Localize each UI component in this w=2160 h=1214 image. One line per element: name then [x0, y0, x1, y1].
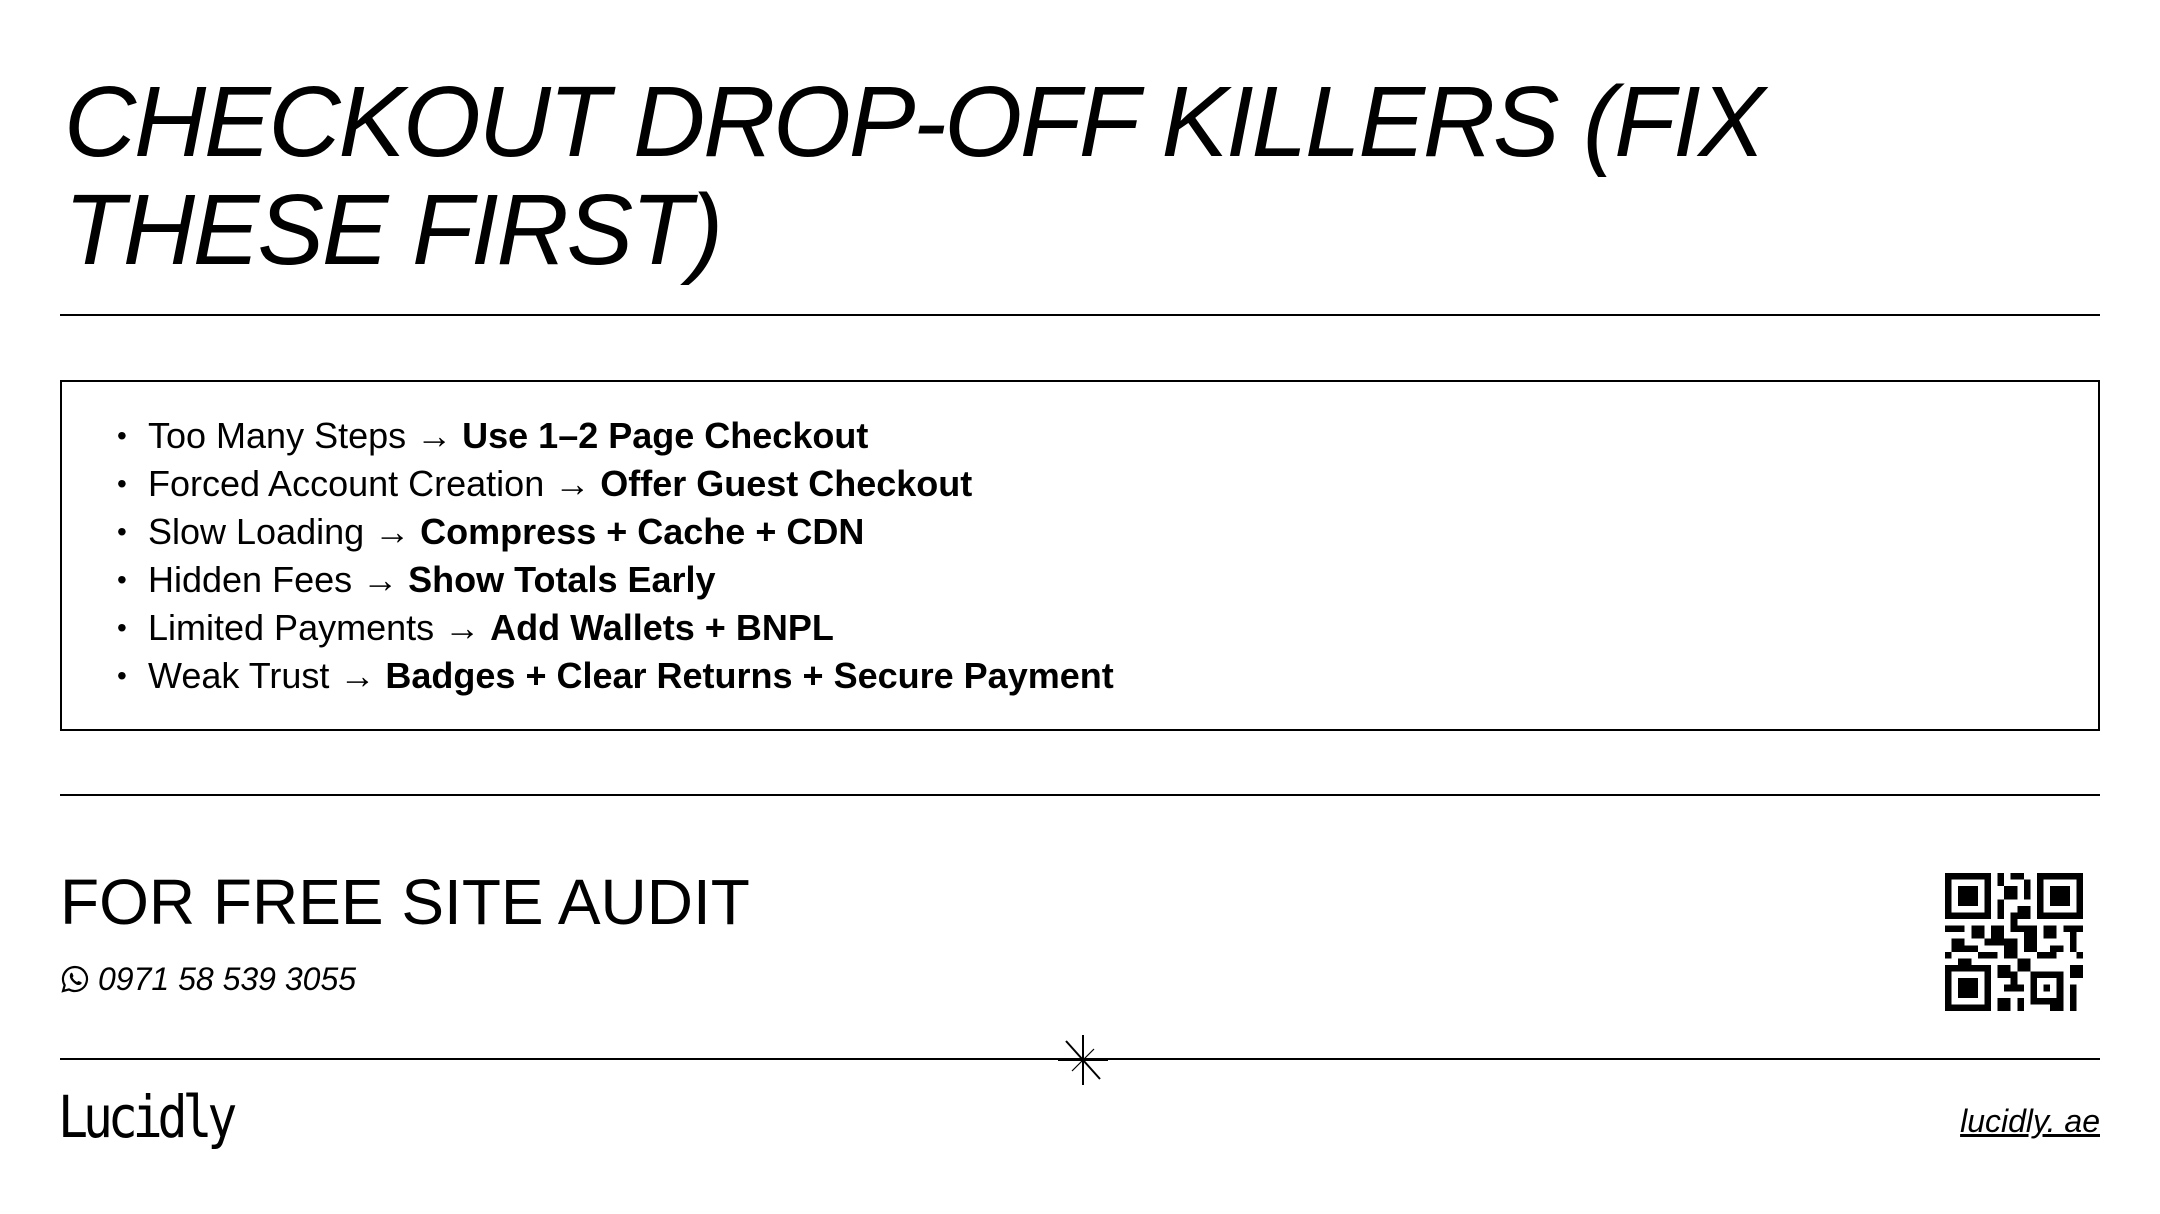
list of killers and fixes: Forced Account Creation → Offer Guest Checkout — [148, 463, 972, 504]
list of killers and fixes: Too Many Steps → Use 1–2 Page Checkout — [148, 415, 868, 456]
icon: sparkle star — [1058, 1035, 1108, 1085]
contact phone: 0971 58 539 3055 — [98, 961, 356, 997]
list of killers and fixes: Limited Payments → Add Wallets + BNPL — [148, 607, 834, 648]
panel: checklist box — [60, 380, 2100, 731]
website link: lucidly. ae — [1960, 1103, 2100, 1139]
logo: Lucidly: Lucidly — [58, 1083, 232, 1151]
list of killers and fixes — [118, 415, 1114, 696]
list of killers and fixes: Hidden Fees → Show Totals Early — [148, 559, 716, 600]
list of killers and fixes: Slow Loading → Compress + Cache + CDN — [148, 511, 864, 552]
list of killers and fixes: Weak Trust → Badges + Clear Returns + Secure Payment — [148, 655, 1114, 696]
icon: whatsapp — [61, 966, 88, 993]
QR code — [1945, 873, 2083, 1011]
CTA heading: FOR FREE SITE AUDIT — [60, 866, 750, 938]
title: CHECKOUT DROP-OFF KILLERS (FIX THESE FIRST) — [64, 66, 1763, 286]
